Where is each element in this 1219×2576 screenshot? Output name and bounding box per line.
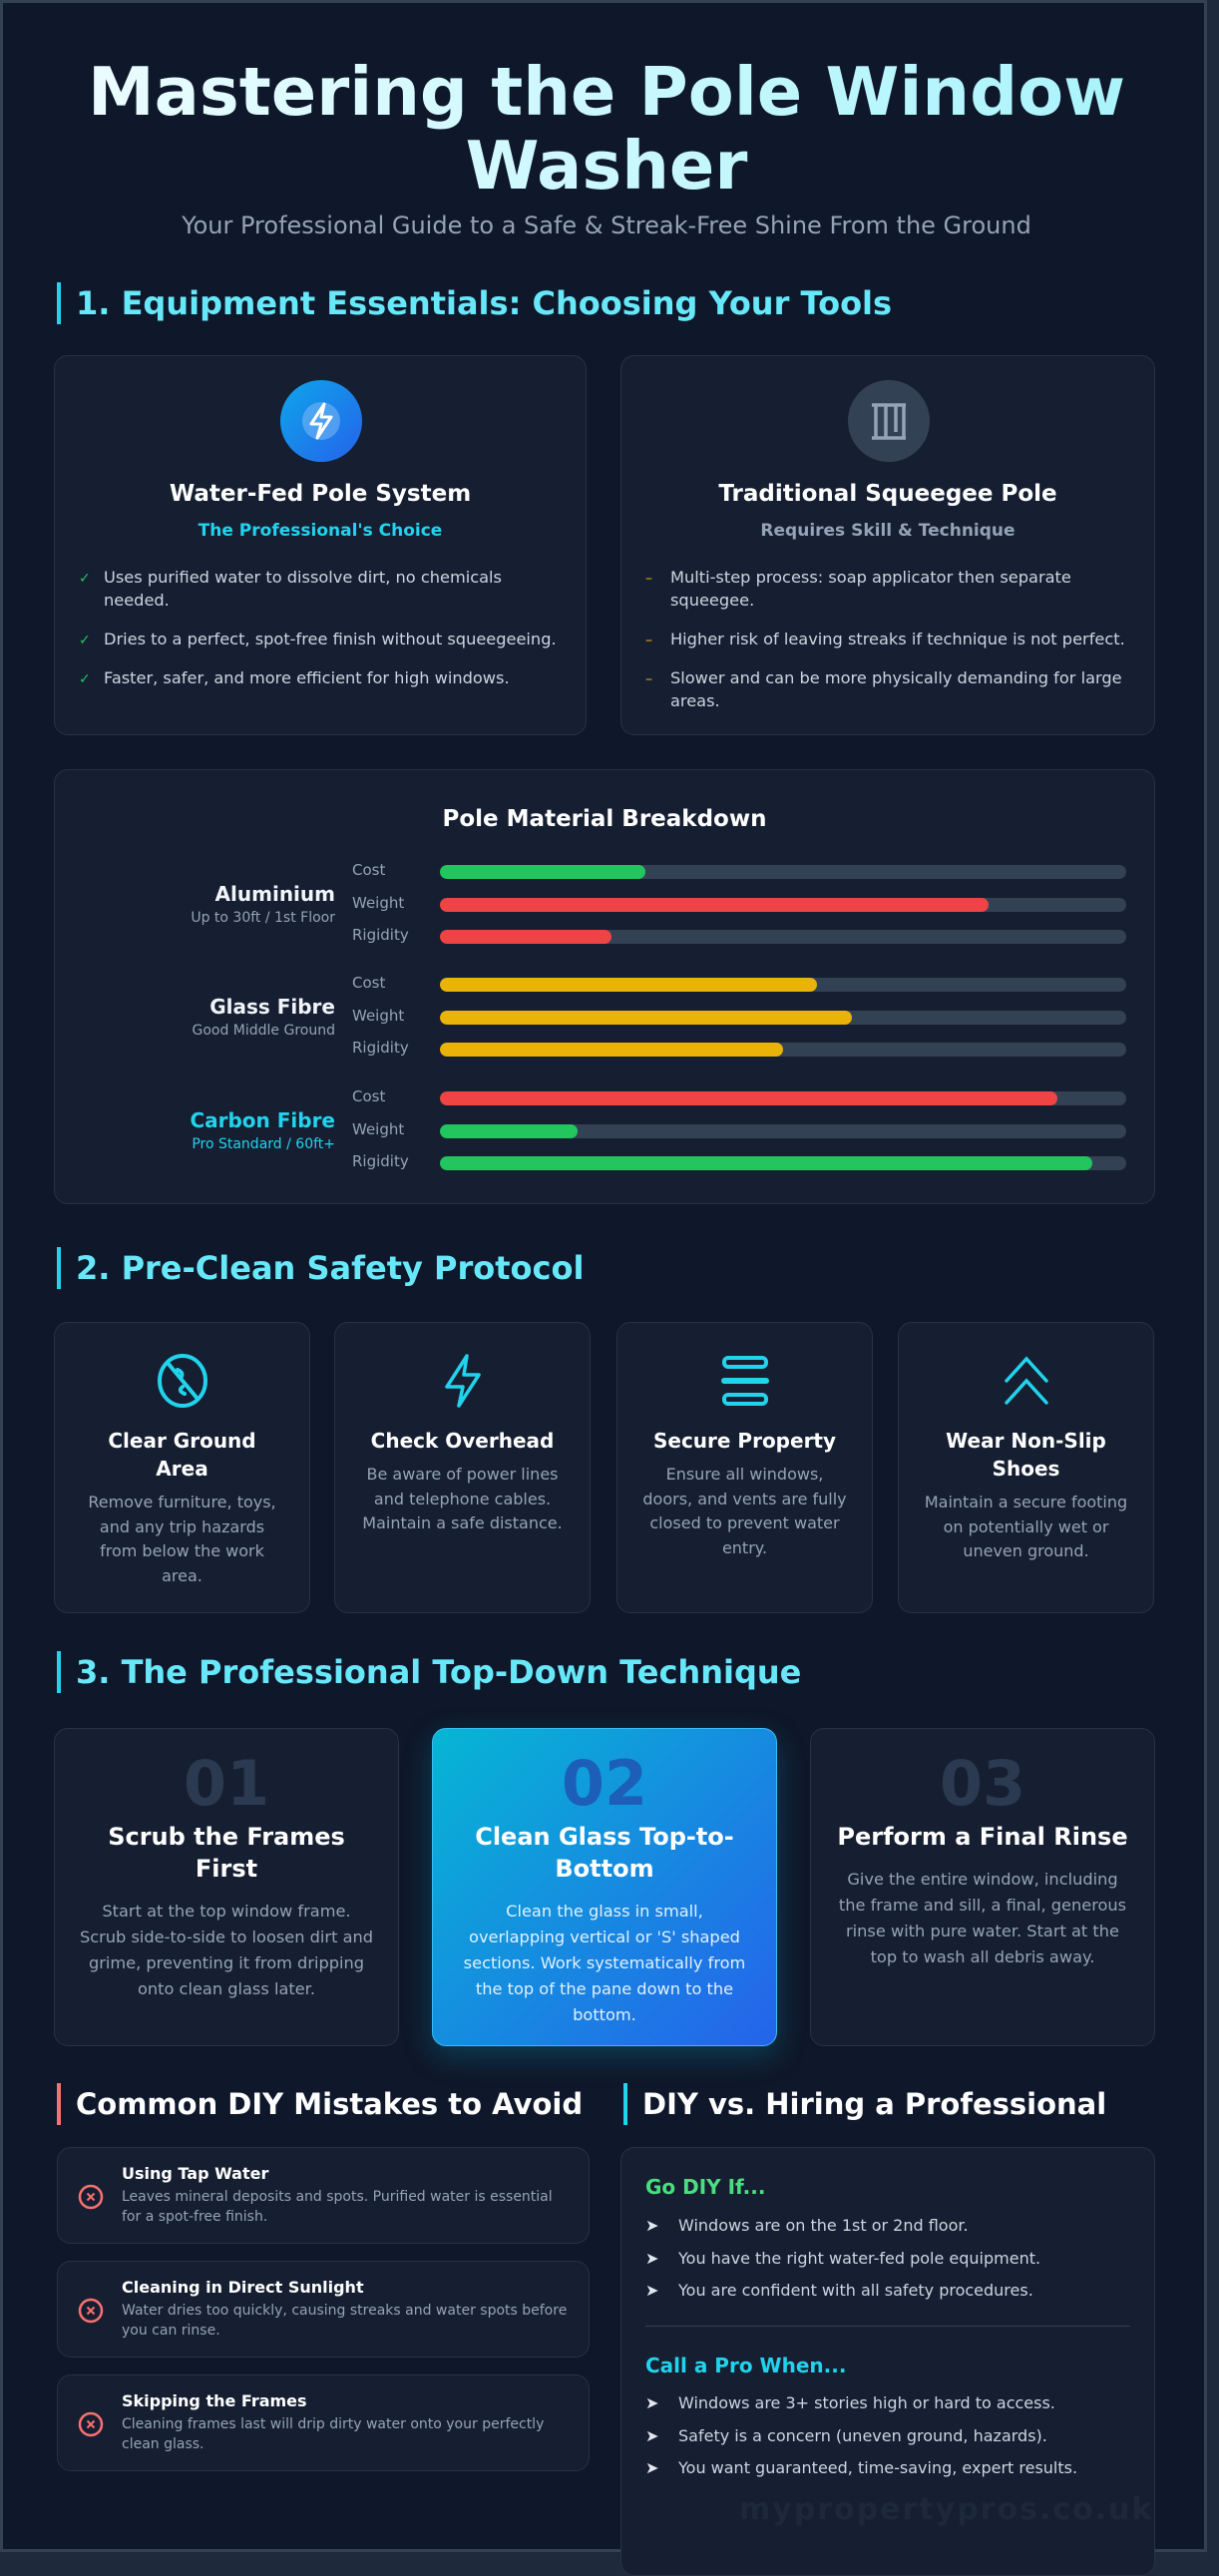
icon: no-entry xyxy=(158,1354,207,1408)
card title: Shoes xyxy=(993,1457,1059,1481)
bar chart: pole material breakdown xyxy=(54,769,1155,1204)
benefits list: Uses purified water to dissolve dirt, no chemicals needed. xyxy=(104,568,502,610)
group: glass fibre: Weight xyxy=(352,1007,404,1025)
panel: step 02 (highlighted) xyxy=(432,1728,777,2046)
description: Start at the top window frame. Scrub side-to-side to loosen dirt and grime, preventing it from dripping onto clean glass later. xyxy=(80,1902,373,1998)
group: glass fibre: Glass Fibre xyxy=(209,995,335,1019)
group: aluminium: Rigidity xyxy=(352,926,409,944)
mistake: sunlight: Cleaning in Direct Sunlight xyxy=(122,2278,364,2297)
go DIY list: ➤ xyxy=(645,2249,658,2267)
heading: mistakes: Common DIY Mistakes to Avoid xyxy=(76,2087,583,2121)
card subtitle: Requires Skill & Technique xyxy=(760,521,1016,541)
go DIY list: ➤ xyxy=(645,2281,658,2300)
description: Maintain a secure footing on potentially wet or uneven ground. xyxy=(925,1493,1127,1560)
mistake: tap water: Using Tap Water xyxy=(122,2164,268,2183)
panel: clear ground xyxy=(54,1322,310,1613)
call a pro list: Safety is a concern (uneven ground, hazards). xyxy=(678,2426,1047,2444)
mistake: sunlight xyxy=(57,2261,590,2358)
icon: water-fed xyxy=(280,380,362,462)
group: glass fibre: Cost xyxy=(352,974,385,992)
go DIY list: You are confident with all safety procedures. xyxy=(678,2281,1033,2300)
card title xyxy=(946,1429,1106,1481)
heading: section 2: 2. Pre-Clean Safety Protocol xyxy=(76,1249,584,1287)
card subtitle: The Professional's Choice xyxy=(199,521,442,541)
panel: DIY vs pro xyxy=(620,2147,1155,2576)
card title: Area xyxy=(156,1457,208,1481)
drawbacks list: – xyxy=(645,671,652,687)
group: glass fibre xyxy=(192,974,1126,1057)
card title: Secure Property xyxy=(653,1429,836,1453)
drawbacks list: Higher risk of leaving streaks if technique is not perfect. xyxy=(670,630,1125,648)
group: carbon fibre xyxy=(190,1087,1126,1170)
go DIY list: Windows are on the 1st or 2nd floor. xyxy=(678,2216,969,2235)
heading: section 3: 3. The Professional Top-Down Technique xyxy=(76,1653,801,1691)
panel: water-fed pole xyxy=(54,355,587,735)
step number: 01 xyxy=(184,1747,269,1820)
mistake: tap water xyxy=(57,2147,590,2244)
description: Give the entire window, including the frame and sill, a final, generous rinse with pure water. Start at the top to wash all debris away. xyxy=(839,1870,1126,1966)
group: aluminium: Cost xyxy=(352,861,385,879)
step title: Scrub the Frames xyxy=(108,1823,345,1851)
description: Ensure all windows, doors, and vents are fully closed to prevent water entry. xyxy=(642,1465,847,1556)
panel: check overhead xyxy=(334,1322,591,1613)
card title: Clear Ground xyxy=(108,1429,256,1453)
icon: lightning xyxy=(445,1354,481,1408)
call a pro list: You want guaranteed, time-saving, expert results. xyxy=(678,2458,1077,2477)
description: Be aware of power lines and telephone cables. Maintain a safe distance. xyxy=(362,1465,563,1532)
step title: Bottom xyxy=(555,1855,654,1883)
group: aluminium: Aluminium xyxy=(215,882,335,906)
step number: 03 xyxy=(940,1747,1025,1820)
card title: Water-Fed Pole System xyxy=(170,481,471,507)
step number: 02 xyxy=(562,1747,647,1820)
group: glass fibre: Good Middle Ground xyxy=(192,1023,335,1039)
heading: DIY vs pro: DIY vs. Hiring a Professional xyxy=(642,2087,1106,2121)
subtitle: Your Professional Guide to a Safe & Streak-Free Shine From the Ground xyxy=(182,212,1031,239)
mistake: frames xyxy=(57,2374,590,2471)
group: aluminium: Up to 30ft / 1st Floor xyxy=(191,910,335,926)
step title xyxy=(108,1823,345,1883)
panel: secure property xyxy=(616,1322,873,1613)
benefits list: Faster, safer, and more efficient for high windows. xyxy=(104,668,510,687)
drawbacks list: – xyxy=(645,633,652,648)
call a pro list xyxy=(645,2393,1077,2477)
call a pro list: ➤ xyxy=(645,2426,658,2444)
description: Clean the glass in small, overlapping vertical or 'S' shaped sections. Work systematically from the top of the pane down to the bottom. xyxy=(464,1902,745,2024)
group: aluminium: Weight xyxy=(352,894,404,912)
drawbacks list xyxy=(645,568,1125,710)
panel: non-slip shoes xyxy=(898,1322,1154,1613)
mistake: sunlight: Water dries too quickly, causing streaks and water spots before you can rinse. xyxy=(122,2303,567,2339)
step title: Perform a Final Rinse xyxy=(837,1823,1128,1851)
panel: traditional squeegee xyxy=(620,355,1155,735)
group: carbon fibre: Rigidity xyxy=(352,1152,409,1170)
group: aluminium xyxy=(191,861,1126,944)
icon: error xyxy=(78,2412,104,2436)
title xyxy=(3,55,1210,203)
go DIY list: ➤ xyxy=(645,2216,658,2235)
step title: Clean Glass Top-to- xyxy=(475,1823,734,1851)
group: glass fibre: Rigidity xyxy=(352,1039,409,1057)
mistake: frames: Skipping the Frames xyxy=(122,2391,307,2410)
go DIY heading: Go DIY If... xyxy=(645,2175,765,2199)
watermark: mypropertypros.co.uk xyxy=(739,2492,1153,2527)
call a pro list: ➤ xyxy=(645,2393,658,2412)
icon: error xyxy=(78,2185,104,2209)
panel: step 01 xyxy=(54,1728,399,2046)
drawbacks list: Slower and can be more physically demanding for large areas. xyxy=(670,668,1122,710)
go DIY list: You have the right water-fed pole equipment. xyxy=(678,2249,1040,2267)
card title: Check Overhead xyxy=(371,1429,554,1453)
chart title: Pole Material Breakdown xyxy=(443,806,766,832)
panel: step 03 xyxy=(810,1728,1155,2046)
benefits list: ✓ xyxy=(79,571,91,587)
group: carbon fibre: Pro Standard / 60ft+ xyxy=(192,1136,335,1152)
icon: bars xyxy=(721,1356,769,1406)
icon: squeegee xyxy=(848,380,930,462)
mistake: frames: Cleaning frames last will drip dirty water onto your perfectly clean glass. xyxy=(122,2416,544,2452)
group: carbon fibre: Cost xyxy=(352,1087,385,1105)
title: Washer xyxy=(466,127,747,205)
benefits list: Dries to a perfect, spot-free finish without squeegeeing. xyxy=(104,630,557,648)
icon: error xyxy=(78,2299,104,2323)
step title xyxy=(475,1823,734,1883)
benefits list xyxy=(79,568,557,687)
call a pro heading: Call a Pro When... xyxy=(645,2354,846,2377)
benefits list: ✓ xyxy=(79,633,91,648)
go DIY list xyxy=(645,2216,1040,2300)
icon: chevrons xyxy=(1005,1357,1048,1405)
benefits list: ✓ xyxy=(79,671,91,687)
step title: First xyxy=(196,1855,257,1883)
group: carbon fibre: Carbon Fibre xyxy=(190,1108,335,1132)
card title: Traditional Squeegee Pole xyxy=(718,481,1057,507)
group: carbon fibre: Weight xyxy=(352,1120,404,1138)
mistake: tap water: Leaves mineral deposits and spots. Purified water is essential for a spot-free finish. xyxy=(122,2189,553,2225)
heading: section 1: 1. Equipment Essentials: Choosing Your Tools xyxy=(76,284,892,322)
call a pro list: ➤ xyxy=(645,2458,658,2477)
drawbacks list: Multi-step process: soap applicator then separate squeegee. xyxy=(670,568,1071,610)
description: Remove furniture, toys, and any trip hazards from below the work area. xyxy=(88,1493,276,1584)
card title: Wear Non-Slip xyxy=(946,1429,1106,1453)
call a pro list: Windows are 3+ stories high or hard to access. xyxy=(678,2393,1055,2412)
title: Mastering the Pole Window xyxy=(88,53,1125,131)
drawbacks list: – xyxy=(645,571,652,587)
card title xyxy=(108,1429,256,1481)
